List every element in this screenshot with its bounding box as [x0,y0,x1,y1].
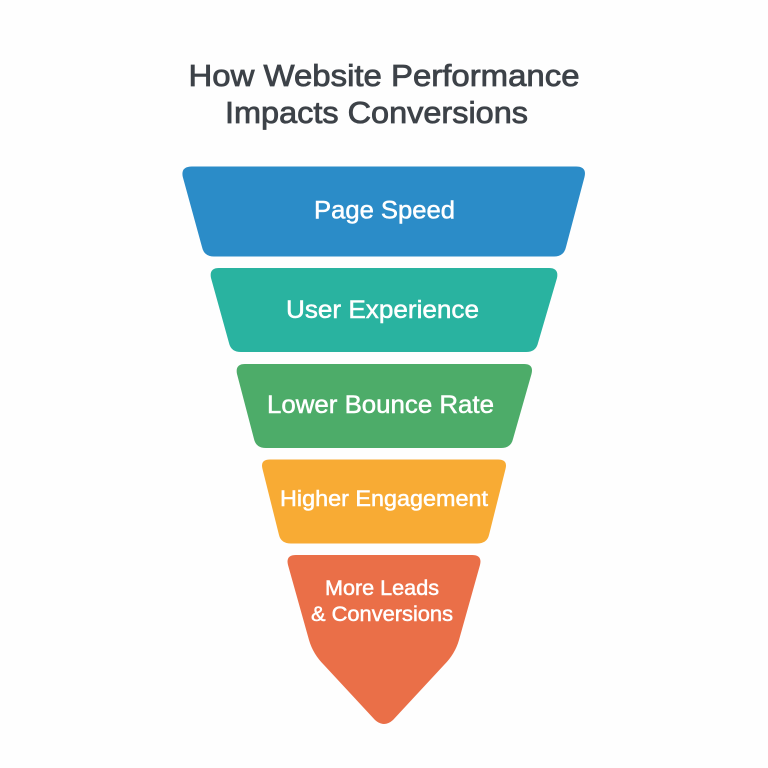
panel: more leads and conversions [288,555,480,724]
title: Impacts Conversions [225,95,528,130]
title: How Website Performance [188,58,580,93]
panel: user experience [211,268,557,352]
panel: more leads and conversions: More Leads [325,577,439,600]
panel: lower bounce rate [237,364,532,448]
panel: user experience: User Experience [286,296,479,324]
panel: lower bounce rate: Lower Bounce Rate [267,391,494,419]
panel: higher engagement: Higher Engagement [280,486,488,511]
panel: more leads and conversions: & Conversions [311,603,453,626]
title [188,58,580,130]
panel: page speed [182,166,585,256]
panel: page speed: Page Speed [314,196,455,224]
panel: higher engagement [262,460,506,544]
funnel [182,166,585,724]
